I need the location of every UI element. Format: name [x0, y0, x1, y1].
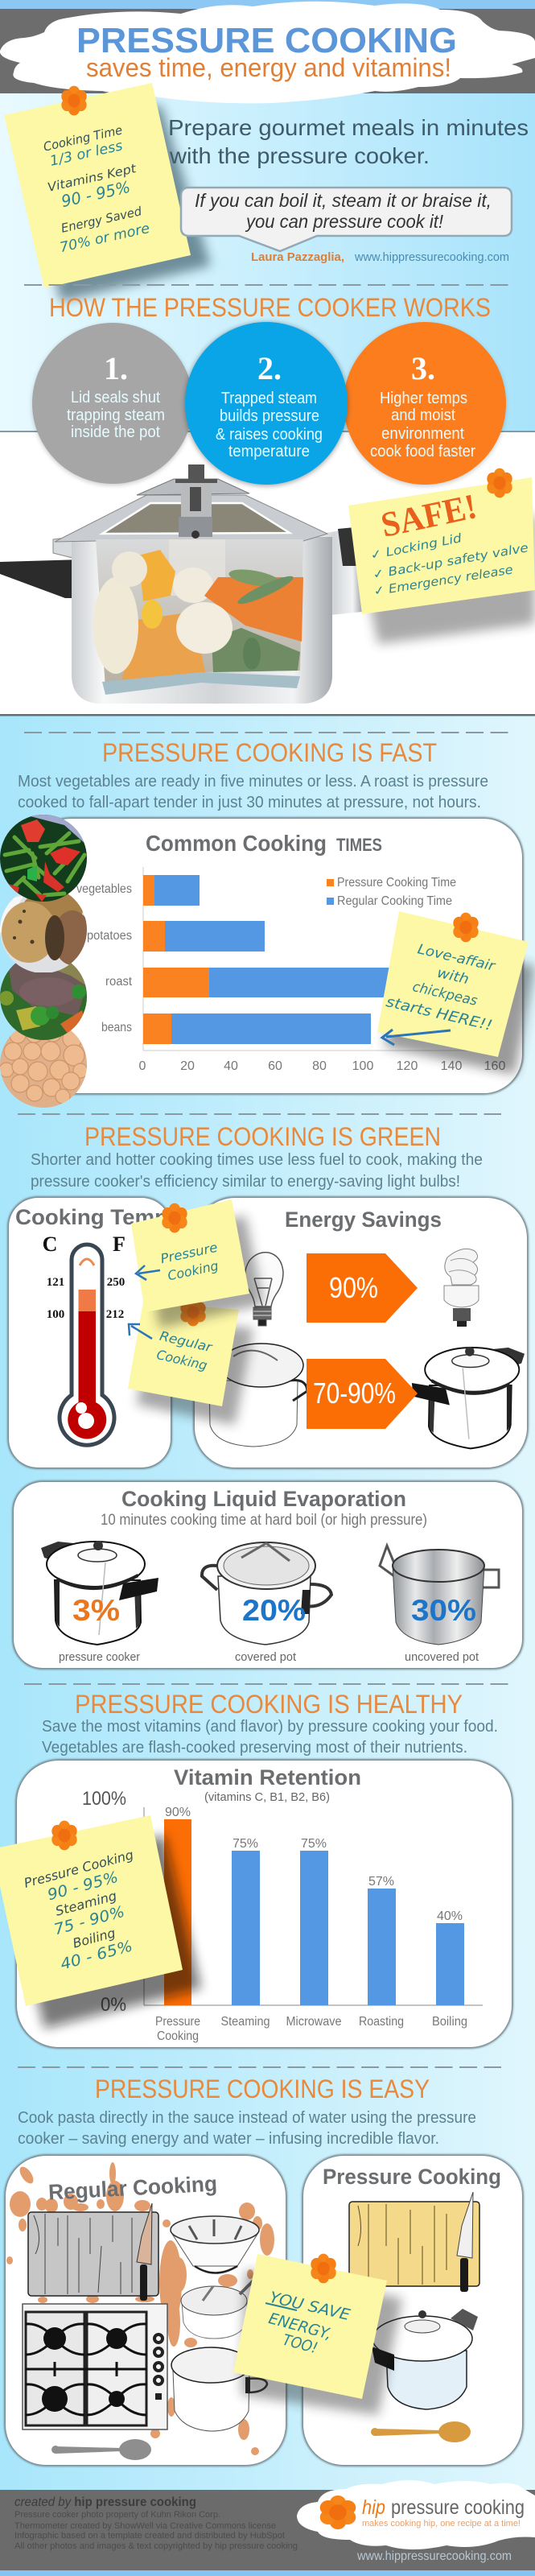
- pressure cooker, coloured: [372, 2309, 478, 2409]
- pressure cooker: pressure cooker: [59, 1650, 140, 1664]
- sticky note: vitamins: 40 - 65%: [59, 1937, 134, 1974]
- credits: Thermometer created by ShowWell via Creative Commons license: [14, 2521, 276, 2531]
- sticky note: chickpeas: starts HERE!!: [385, 993, 494, 1034]
- icon: covered pot: [209, 1344, 307, 1447]
- quote attribution: www.hippressurecooking.com: [354, 250, 509, 264]
- circle step 1: [32, 323, 193, 485]
- icon: pressure cooker: [412, 1347, 525, 1448]
- text: fast: Most vegetables are ready in five minutes or less. A roast is pressure: [18, 773, 488, 791]
- grey spoon: [51, 2439, 151, 2460]
- heading: green: PRESSURE COOKING IS GREEN: [84, 1122, 441, 1151]
- cutaway pressure cooker with vegetables: [0, 464, 362, 704]
- footer cloud logo: [297, 2480, 535, 2549]
- sticky note: chickpeas: chickpeas: [411, 979, 479, 1009]
- intro text: with the pressure cooker.: [169, 143, 430, 168]
- panel: vitamin retention chart: Vitamin Retention: [174, 1765, 361, 1790]
- sticky note: pressure cooking: [131, 1199, 264, 1328]
- stock pot: [171, 2347, 267, 2431]
- circle step 2: temperature: [228, 443, 310, 460]
- arrow to beans bar: [382, 1030, 451, 1045]
- text: fast: cooked to fall-apart tender in just 30 minutes at pressure, not hours.: [18, 794, 481, 811]
- credits: [14, 2496, 298, 2551]
- panel: cooking temp: F: [113, 1232, 126, 1256]
- circle step 1: inside the pot: [71, 423, 160, 441]
- sticky note: vitamins: Pressure Cooking: [23, 1847, 135, 1891]
- panel: pressure cooking: [303, 2156, 522, 2465]
- circle step 3: 3.: [411, 350, 435, 386]
- intro text: Prepare gourmet meals in minutes: [168, 115, 529, 140]
- text: green: pressure cooker's efficiency similar to energy-saving light bulbs!: [31, 1173, 460, 1191]
- icon: incandescent bulb: [245, 1253, 283, 1326]
- bar chart: Roasting: [359, 2015, 404, 2029]
- circle step 3: and moist: [391, 407, 455, 424]
- arrow: 90%: [307, 1253, 418, 1323]
- sticky note: chickpeas: [377, 911, 535, 1075]
- sticky note: safe: [348, 469, 535, 644]
- panel: cooking temp: 250: [107, 1276, 125, 1289]
- panel: vitamin retention chart: [17, 1761, 512, 2047]
- circle step 3: environment: [381, 425, 464, 443]
- sticky note: vitamins: 75 - 90%: [52, 1903, 126, 1938]
- bar chart: [144, 1806, 483, 2043]
- chart title: TIMES: [336, 835, 382, 855]
- text: easy: cooker – saving energy and water – infusing incredible flavor.: [18, 2130, 439, 2148]
- pressure cooker: [41, 1541, 158, 1664]
- text: easy: [18, 2109, 476, 2148]
- sticky note: key stats: [4, 83, 211, 302]
- bar chart: 90%: [165, 1806, 191, 1819]
- panel: cooking liquid evaporation: 10 minutes cooking time at hard boil (or high pressure): [101, 1512, 427, 1529]
- covered pot: covered pot: [235, 1650, 297, 1664]
- sticky note: safe: SAFE!: [377, 486, 480, 545]
- sticky note: key stats: Vitamins Kept: [46, 161, 138, 195]
- bar chart: 140: [441, 1059, 462, 1073]
- splatter: [6, 2162, 274, 2455]
- category axis labels: potatoes: [87, 929, 132, 943]
- food photo: vegetables: [0, 815, 87, 902]
- bar chart: 75%: [233, 1837, 258, 1851]
- arrow: regular cooking temp: [129, 1324, 152, 1339]
- sticky note: pressure cooking: Cooking: [167, 1258, 220, 1283]
- white band behind cooker: [0, 431, 535, 716]
- bar chart: 75%: [301, 1837, 327, 1851]
- text: fast: [18, 773, 488, 811]
- uncovered pot: 30%: [411, 1594, 476, 1627]
- title: PRESSURE COOKING: [76, 21, 457, 60]
- arrow: pressure cooking temp: [136, 1265, 160, 1280]
- arrow: 70-90%: [307, 1359, 418, 1429]
- bar chart: 80: [312, 1059, 327, 1073]
- sticky note: you save energy: YOU SAVE: [268, 2289, 352, 2324]
- bar chart: 57%: [368, 1875, 394, 1889]
- credits: All other photos and images & text copyrighted by hip pressure cooking: [14, 2541, 298, 2551]
- sticky note: regular cooking: Cooking: [155, 1347, 208, 1373]
- circle step 1: Lid seals shut: [71, 389, 160, 407]
- heading: healthy: PRESSURE COOKING IS HEALTHY: [75, 1690, 463, 1719]
- sticky note: key stats: Cooking Time: [42, 122, 124, 155]
- bar chart: 120: [397, 1059, 418, 1073]
- sticky note: key stats: 1/3 or less: [48, 138, 124, 170]
- chart title: Common Cooking: [146, 831, 327, 856]
- panel: energy savings: [195, 1198, 527, 1468]
- bar chart: Microwave: [286, 2015, 342, 2029]
- panel: cooking temp: 121: [47, 1276, 64, 1289]
- text: green: Shorter and hotter cooking times use less fuel to cook, making the: [31, 1151, 483, 1169]
- arrow: 70-90%: 70-90%: [313, 1377, 396, 1410]
- bar chart: Cooking: [157, 2029, 199, 2043]
- sticky note: key stats: 90 - 95%: [60, 177, 132, 211]
- bar chart: 0: [139, 1059, 146, 1073]
- bar chart: 100: [352, 1059, 373, 1073]
- sticky note: pressure cooking: Pressure: [159, 1240, 219, 1266]
- sticky note: you save energy: TOO!: [281, 2331, 319, 2357]
- circle step 1: 1.: [104, 350, 128, 386]
- title: [76, 21, 457, 82]
- footer url: www.hippressurecooking.com: [356, 2549, 512, 2563]
- chart legend: Regular Cooking Time: [337, 894, 452, 908]
- panel: cooking liquid evaporation: Cooking Liquid Evaporation: [121, 1487, 406, 1511]
- chart legend: [327, 876, 456, 908]
- circle step 3: cook food faster: [370, 443, 475, 460]
- credits: Pressure cooker photo property of Kuhn Rikon Corp.: [14, 2510, 220, 2520]
- sticky note: safe: ✓ Locking Lid: [369, 530, 463, 563]
- circle step 2: & raises cooking: [216, 426, 323, 444]
- footer band: [0, 2480, 535, 2570]
- heading: easy: PRESSURE COOKING IS EASY: [95, 2074, 430, 2103]
- sticky note: chickpeas: Love-affair: [416, 941, 497, 975]
- credits: created by hip pressure cooking: [14, 2496, 196, 2509]
- wooden spoon: [371, 2421, 471, 2442]
- circle step 2: Trapped steam: [221, 390, 317, 407]
- category axis labels: vegetables: [76, 882, 132, 896]
- panel: vitamin retention chart: 100%: [82, 1788, 126, 1810]
- subtitle: saves time, energy and vitamins!: [86, 53, 451, 82]
- food photo: potatoes: [0, 894, 87, 972]
- stove: [23, 2304, 167, 2429]
- arrow: 90%: 90%: [329, 1271, 378, 1304]
- sticky note: key stats: Energy Saved: [60, 204, 143, 236]
- panel: cooking temp: Cooking Temp: [15, 1205, 168, 1229]
- quote bubble: you can pressure cook it!: [245, 211, 444, 232]
- circle step 2: builds pressure: [220, 407, 319, 425]
- uncovered pot: [380, 1546, 499, 1664]
- footer cloud logo: makes cooking hip, one recipe at a time!: [362, 2519, 521, 2529]
- saucepan: [181, 2280, 254, 2339]
- quote attribution: [251, 250, 509, 264]
- quote attribution: Laura Pazzaglia,: [251, 250, 344, 264]
- text: easy: Cook pasta directly in the sauce instead of water using the pressure: [18, 2109, 476, 2127]
- sticky note: vitamins: Steaming: [54, 1888, 118, 1919]
- panel: cooking temp: [9, 1198, 171, 1468]
- bar chart: 160: [484, 1059, 505, 1073]
- circle step 3: Higher temps: [380, 390, 467, 407]
- panel: cooking temp: C: [43, 1232, 57, 1256]
- sticky note: chickpeas: with: [435, 965, 471, 988]
- bar chart: 60: [268, 1059, 282, 1073]
- chart legend: Pressure Cooking Time: [337, 876, 456, 890]
- category axis labels: roast: [105, 975, 133, 989]
- circle step 1: trapping steam: [67, 407, 165, 424]
- bar chart: Steaming: [220, 2015, 270, 2029]
- text: healthy: [42, 1718, 498, 1757]
- sticky note: key stats: 70% or more: [58, 221, 151, 256]
- panel: cooking temp: 212: [106, 1308, 124, 1321]
- uncovered pot: uncovered pot: [405, 1650, 479, 1664]
- category axis labels: beans: [101, 1021, 132, 1034]
- title: Regular Cooking: [47, 2172, 218, 2204]
- panel: vitamin retention chart: (vitamins C, B1, B2, B6): [204, 1790, 330, 1804]
- wooden cutting board: [349, 2192, 479, 2292]
- text: green: [31, 1151, 483, 1191]
- bar chart: Boiling: [432, 2015, 467, 2029]
- sticky note: safe: ✓ Back-up safety valve: [372, 540, 529, 582]
- sticky note: you save energy: [233, 2254, 402, 2415]
- panel: vitamin retention chart: 0%: [101, 1994, 126, 2016]
- sticky note: regular cooking: [128, 1298, 253, 1425]
- circle step 2: 2.: [257, 350, 282, 386]
- panel: energy savings: Energy Savings: [285, 1208, 442, 1232]
- sticky note: safe: ✓ Emergency release: [372, 562, 514, 599]
- panel: pressure cooking: Pressure Cooking: [323, 2165, 501, 2189]
- sticky note: vitamins: 90 - 95%: [46, 1868, 120, 1904]
- header band: [0, 2, 535, 103]
- heading: fast: PRESSURE COOKING IS FAST: [102, 738, 437, 767]
- heading: how the pressure cooker works: HOW THE PRESSURE COOKER WORKS: [49, 293, 491, 322]
- bar chart: [139, 867, 505, 1073]
- panel: common cooking times chart: [32, 819, 522, 1093]
- sticky note: vitamins: [0, 1815, 201, 2029]
- covered pot: [202, 1542, 331, 1664]
- quote bubble: If you can boil it, steam it or braise it,: [195, 190, 492, 211]
- circle step 3: [344, 322, 506, 486]
- bar chart: 40: [224, 1059, 238, 1073]
- pressure cooker: 3%: [72, 1594, 120, 1627]
- panel: regular cooking: [6, 2156, 286, 2465]
- thermometer: [60, 1245, 114, 1445]
- panel: cooking liquid evaporation: [14, 1482, 522, 1668]
- covered pot: 20%: [242, 1594, 306, 1627]
- sticky note: vitamins: Boiling: [71, 1925, 117, 1951]
- food photo: roast: [0, 963, 87, 1040]
- quote bubble: [181, 188, 512, 251]
- grey cutting board: [28, 2203, 158, 2301]
- sticky note: regular cooking: Regular: [158, 1328, 215, 1356]
- intro text: [168, 115, 529, 168]
- footer cloud logo: hip: [362, 2496, 385, 2519]
- text: healthy: Vegetables are flash-cooked preserving most of their nutrients.: [42, 1739, 467, 1757]
- panel: cooking temp: 100: [47, 1308, 64, 1321]
- bar chart: Pressure: [155, 2015, 200, 2029]
- text: healthy: Save the most vitamins (and flavor) by pressure cooking your food.: [42, 1718, 498, 1736]
- circle step 2: [184, 322, 348, 486]
- food photo: chickpeas: [0, 1030, 87, 1108]
- header cloud: [0, 2, 535, 103]
- bar chart: 40%: [437, 1909, 463, 1923]
- category axis labels: [76, 882, 133, 1034]
- sticky note: you save energy: ENERGY,: [267, 2310, 333, 2343]
- icon: cfl bulb: [444, 1249, 479, 1327]
- bar chart: 20: [180, 1059, 195, 1073]
- colander: [171, 2216, 259, 2273]
- credits: Infographic based on a template created and distributed by HubSpot: [14, 2531, 285, 2541]
